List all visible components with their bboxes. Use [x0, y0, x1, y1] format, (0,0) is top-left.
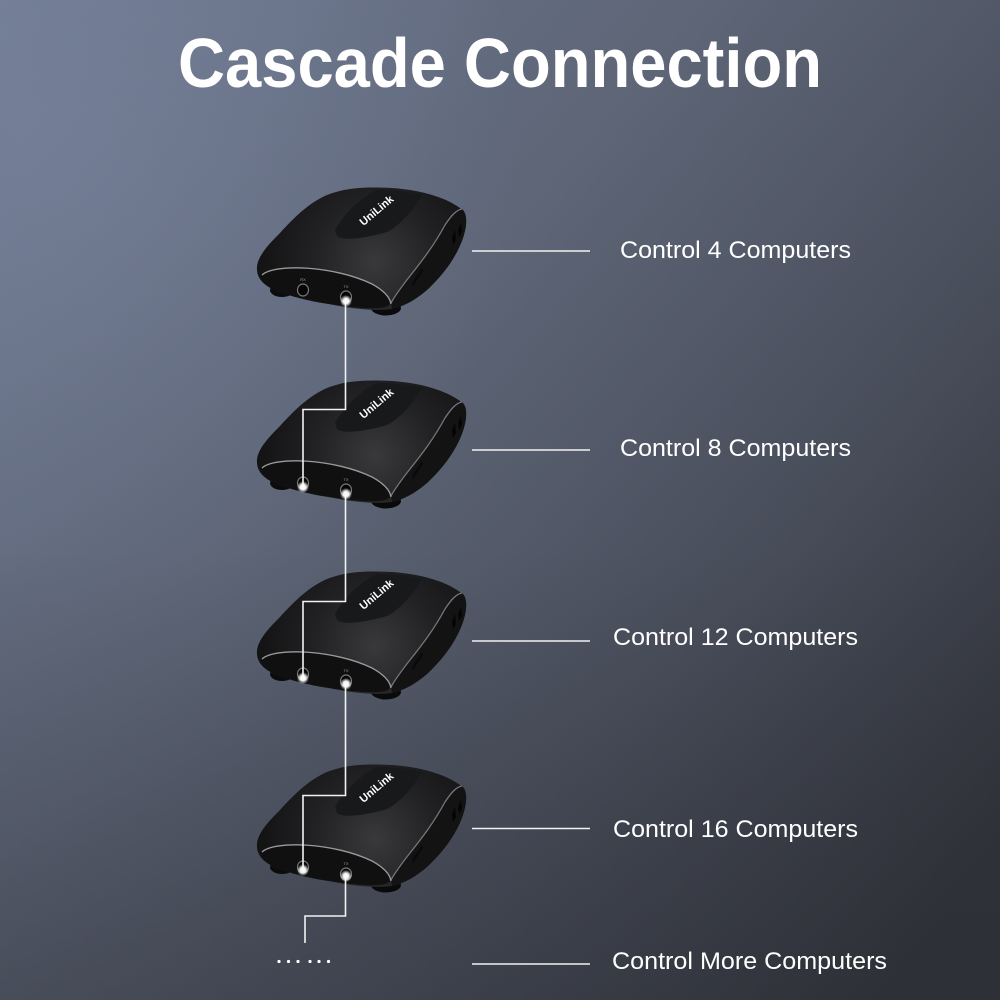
device 3: 12 computers: UniLink — [358, 577, 397, 612]
device 1: 4 computers: UniLink — [358, 193, 397, 228]
device 4: 16 computers: UniLink — [358, 770, 397, 805]
device 1: 4 computers: RX — [300, 277, 306, 282]
ellipsis dots — [277, 960, 330, 963]
label: control 16 computers: Control 16 Computers — [613, 816, 858, 843]
label: control 4 computers: Control 4 Computers — [620, 237, 851, 264]
label: control 8 computers: Control 8 Computers — [620, 435, 851, 462]
device 2: 8 computers: TX — [343, 477, 349, 482]
title: Cascade Connection — [178, 24, 822, 102]
device 3: 12 computers — [257, 571, 466, 700]
device 4: 16 computers — [257, 764, 466, 892]
cascade cables — [303, 301, 346, 943]
device 4: 16 computers: TX — [343, 861, 349, 866]
label leader lines — [472, 251, 590, 964]
label: control 12 computers: Control 12 Computers — [613, 624, 858, 651]
cable connector glows — [297, 295, 352, 882]
device 3: 12 computers: TX — [343, 668, 349, 673]
label: control more computers: Control More Computers — [612, 948, 887, 975]
device 2: 8 computers — [257, 380, 466, 508]
device 2: 8 computers: UniLink — [358, 386, 397, 421]
device 1: 4 computers: TX — [343, 284, 349, 289]
device 1: 4 computers — [257, 187, 466, 316]
